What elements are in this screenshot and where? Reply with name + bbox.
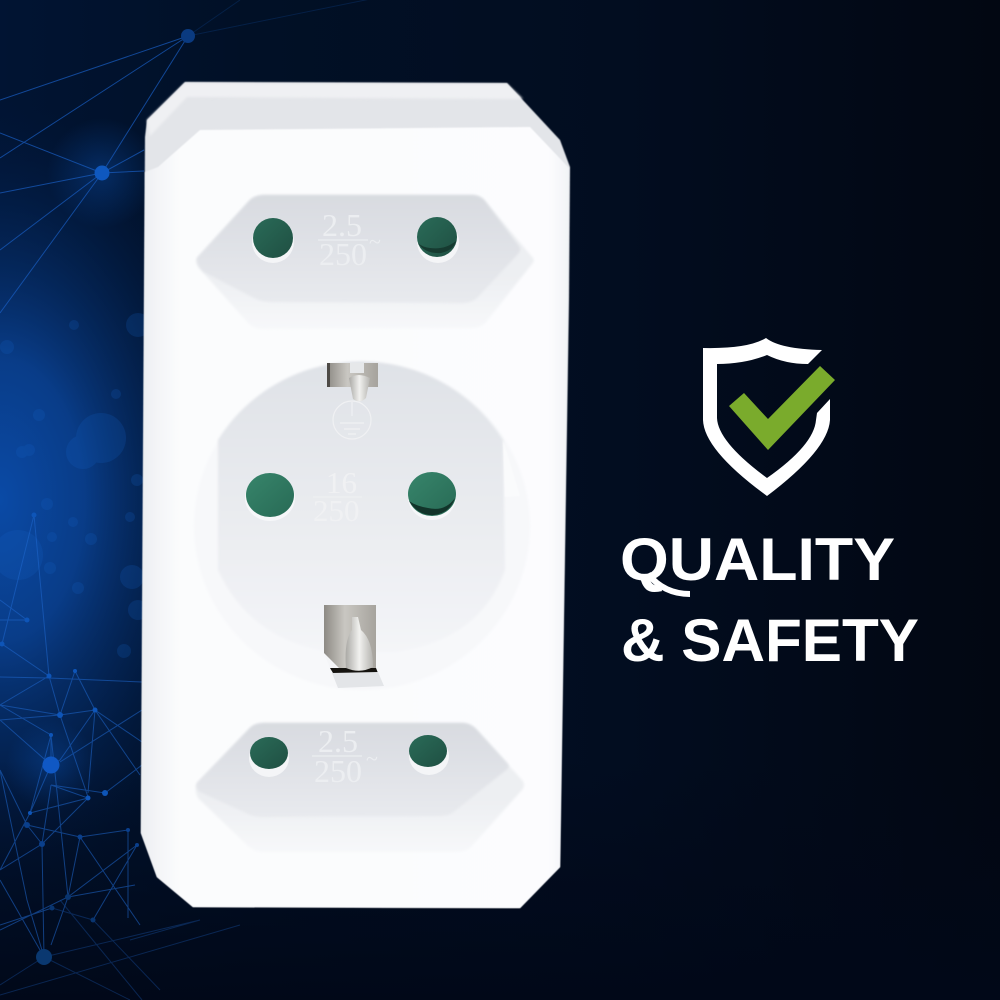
earth symbol — [333, 401, 371, 439]
left pin hole — [252, 218, 294, 263]
recess grey floor — [197, 195, 520, 303]
recess lower wall — [196, 195, 534, 329]
heading line 2: & SAFETY — [621, 607, 919, 674]
central round schuko socket — [194, 362, 530, 690]
rating text 2.5 / 250: 2.5 — [322, 207, 362, 243]
bottom earth contact — [324, 605, 384, 688]
heading line 1: QUALITY — [620, 526, 895, 593]
bokeh circles — [0, 313, 150, 658]
rating text 16 / 250: 16 — [326, 465, 357, 500]
green check mark — [729, 366, 835, 450]
shield outline — [703, 338, 830, 496]
rating text 16 / 250: 250 — [313, 493, 360, 528]
top bevel lighter lip — [147, 83, 523, 136]
bottom euro socket — [196, 723, 524, 852]
socket floor — [218, 362, 505, 652]
right pin hole — [417, 217, 459, 263]
rating text 2.5 / 250: 250 — [314, 753, 362, 789]
rating text 2.5 / 250 — [318, 207, 381, 272]
top earth contact — [327, 363, 378, 401]
top euro socket — [196, 195, 534, 329]
left pin — [249, 737, 289, 777]
network lines: lower cluster — [0, 515, 240, 1000]
network lines: upper cluster — [0, 0, 390, 313]
rating text 16 / 250 — [313, 465, 362, 528]
heading: quality and safety — [620, 526, 919, 674]
rating text 2.5 / 250 — [312, 723, 378, 789]
right pin — [408, 472, 456, 520]
product: white triple socket adapter — [141, 82, 570, 908]
adapter silhouette and top bevel — [141, 82, 570, 908]
rating text 2.5 / 250: 250 — [319, 236, 367, 272]
rating text 2.5 / 250: 2.5 — [318, 723, 358, 759]
rating text 2.5 / 250: ~ — [366, 746, 378, 771]
recess grey floor — [196, 723, 509, 817]
rating text 2.5 / 250: ~ — [369, 229, 381, 254]
icon: shield with green check — [703, 338, 835, 496]
network nodes — [0, 29, 195, 965]
left pin — [245, 473, 295, 521]
socket rim — [194, 362, 530, 690]
recess lower wall — [196, 723, 524, 852]
side notch — [503, 440, 520, 497]
front face — [141, 127, 569, 908]
right pin — [409, 735, 449, 775]
